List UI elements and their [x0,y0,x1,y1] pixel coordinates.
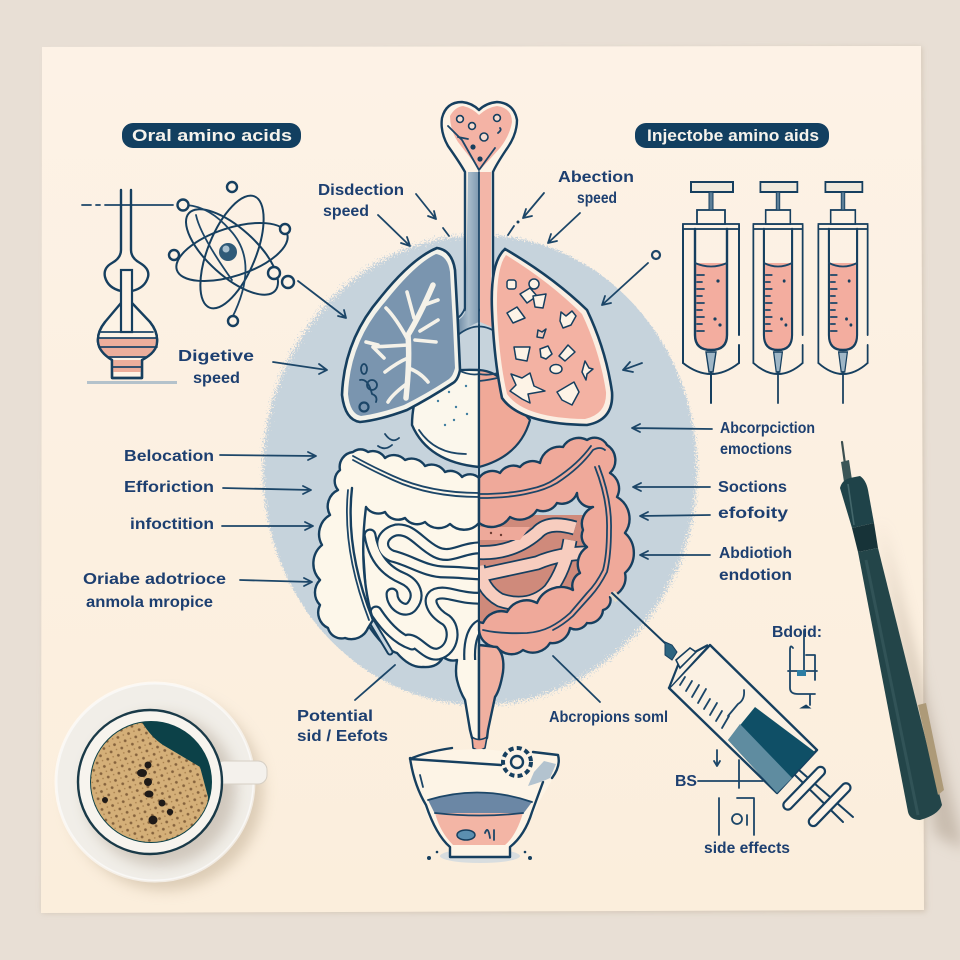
icon: large syringe [612,593,853,828]
text labels: left: Digetive [178,348,254,365]
panel label: oral amino acids: Oral amino acids [132,126,292,145]
cup handle [215,761,267,784]
center divider line [478,325,480,770]
text labels: right: Abection [558,169,634,186]
panel label: injectable amino acids [635,123,829,148]
text labels: right: endotion [719,567,792,584]
bs side effects diagram [698,750,763,835]
large intestine: injectable half [479,438,634,745]
arrow: atom to lung [298,281,346,318]
text labels: right: Abcropions soml [549,709,668,726]
text labels: right [549,169,822,857]
heart-shaped top with stem [442,102,517,335]
text labels: left: Oriabe adotrioce [83,571,226,588]
beaker [410,748,559,863]
text labels: right: emoctions [720,441,792,458]
icon: pen [840,442,960,850]
panel label: oral amino acids [122,123,301,148]
icon: valve diagram [788,630,817,708]
text labels: right: Bdoid: [772,624,822,641]
text labels: left: Disdection [318,182,404,199]
stomach [378,370,530,467]
small intestine: injectable half [480,515,586,622]
text labels: right: side effects [704,840,790,857]
text labels: left: Efforiction [124,479,214,496]
text labels: left: Potential [297,708,373,725]
right lung [492,249,612,425]
left lung [342,248,460,422]
text labels: left [83,182,404,745]
text labels: left: Belocation [124,448,214,465]
text labels: right: BS [675,773,697,790]
text labels: right: speed [577,190,617,207]
text labels: right: efofoity [718,505,788,522]
background circle [263,235,697,705]
icon: distillation flask [82,190,177,384]
text labels: right: Soctions [718,479,787,496]
large intestine: oral half [313,449,479,652]
text labels: right: Abdiotioh [719,545,792,562]
panel label: injectable amino acids: Injectobe amino aids [647,126,819,145]
icon: atom [169,182,295,326]
text labels: left: speed [323,203,369,220]
small intestine: oral half [364,510,480,740]
text labels: right: Abcorpciction [720,420,815,437]
text labels: left: sid / Eefots [297,728,388,745]
text labels: left: infoctition [130,516,214,533]
arrows: callouts to diagram [220,193,712,702]
text labels: left: speed [193,370,240,387]
icon: gear [503,748,531,776]
rectum tip [472,737,487,750]
text labels: left: anmola mropice [86,594,213,611]
syringe trio [683,182,868,403]
icon: coffee cup on saucer [56,683,267,890]
